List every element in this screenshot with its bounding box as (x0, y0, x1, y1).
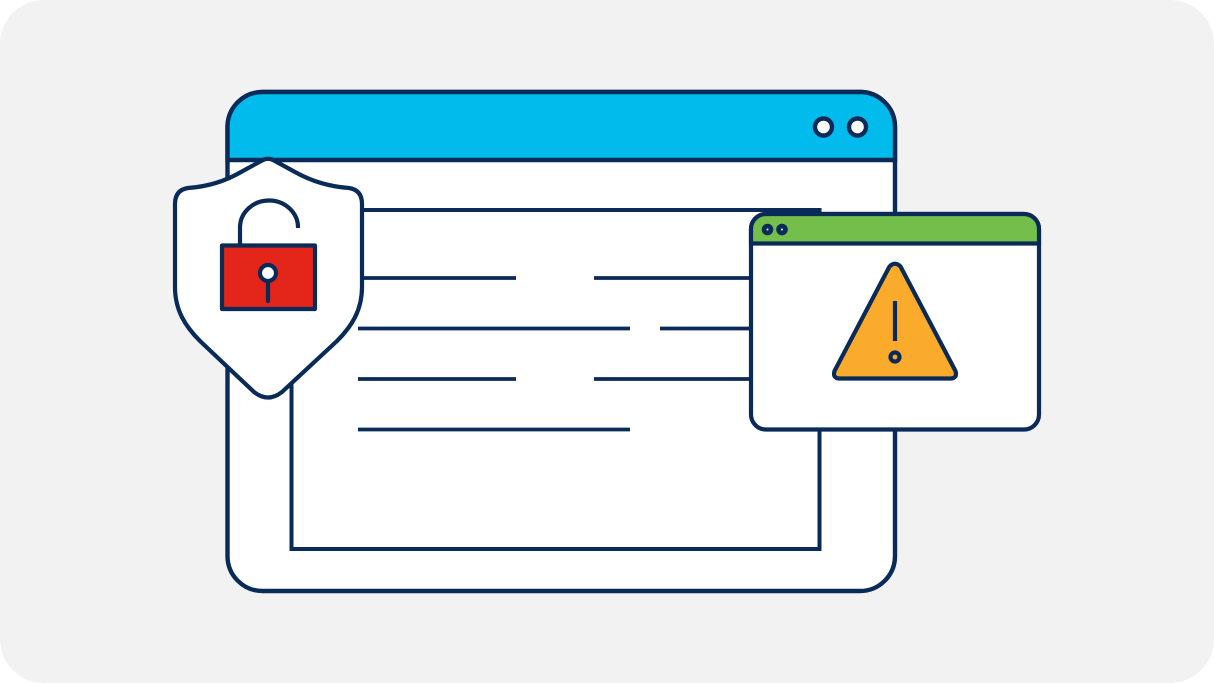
window body (228, 92, 895, 591)
security shield with open padlock (175, 159, 362, 398)
shield outline (175, 159, 362, 398)
window title bar (228, 92, 895, 160)
warning triangle icon (834, 264, 956, 378)
padlock body (222, 246, 315, 309)
keyhole (260, 265, 276, 301)
window control buttons (815, 118, 866, 136)
warning popup window (751, 214, 1039, 430)
popup control buttons (764, 226, 785, 233)
popup body (751, 214, 1039, 430)
main browser window (228, 92, 895, 591)
text lines (358, 278, 752, 430)
popup title bar (751, 214, 1039, 244)
triangle (834, 264, 956, 378)
content frame (292, 210, 820, 549)
padlock shackle (240, 200, 298, 246)
exclamation mark (890, 301, 900, 362)
